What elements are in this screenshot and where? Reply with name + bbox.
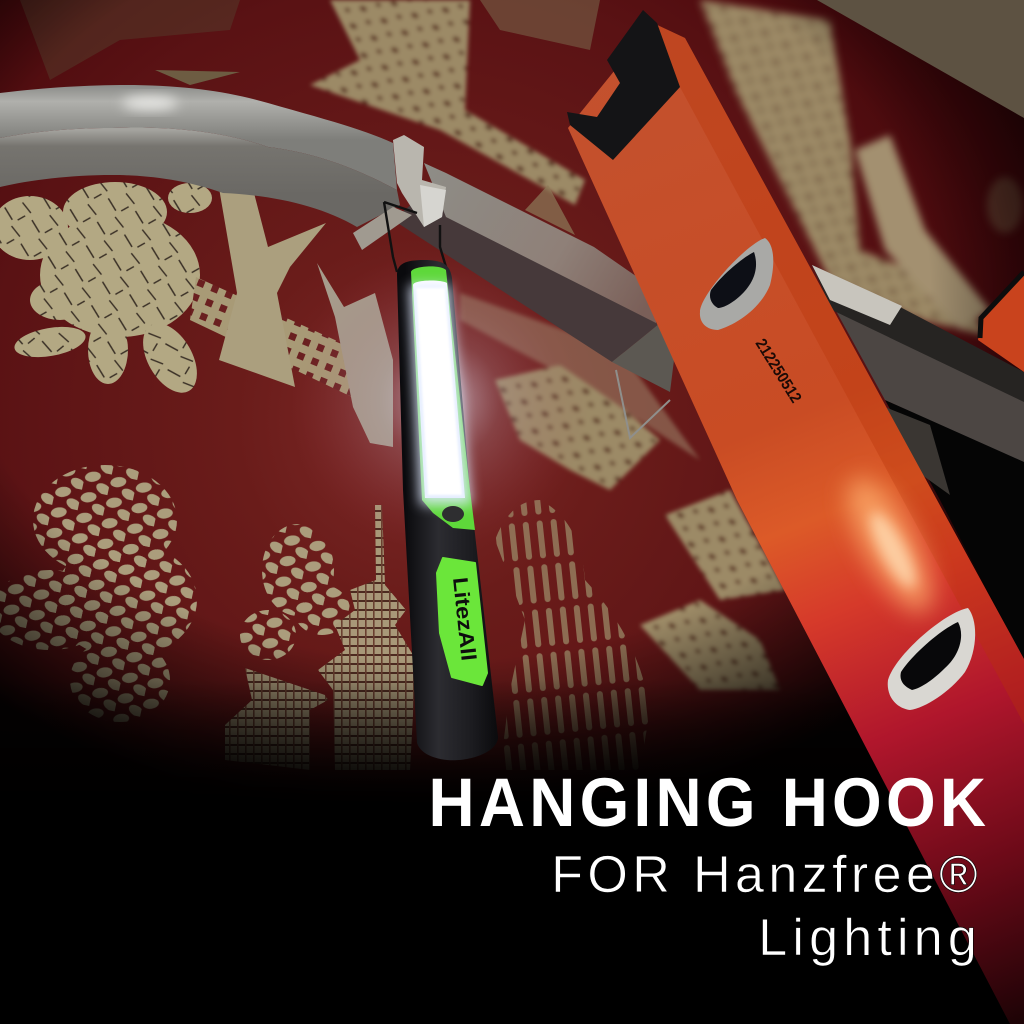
- subheading: FOR Hanzfree®: [551, 846, 982, 904]
- LED glow: [409, 285, 472, 505]
- logo text: LitezAll: [448, 576, 480, 662]
- green surround: [411, 266, 475, 530]
- wallpaper motif: willow tree: [495, 500, 650, 770]
- heading: HANGING HOOK: [428, 764, 990, 841]
- black top bracket: [567, 10, 680, 160]
- ceiling corner: [817, 0, 1024, 118]
- lamp body: [397, 260, 498, 760]
- subheading: [551, 846, 982, 967]
- wallpaper motif: top band: [20, 0, 600, 235]
- green logo badge: [437, 558, 487, 685]
- LED core: [416, 288, 462, 495]
- orange fibreglass ladder: [567, 10, 1024, 1024]
- subheading: Lighting: [758, 909, 982, 967]
- specular highlight on ladder: [832, 467, 948, 623]
- LitezAll work light: [397, 260, 498, 760]
- ladder side strip: [653, 23, 1024, 724]
- serial number: 212250512: [752, 336, 804, 406]
- second ladder fragment at right: [978, 272, 1024, 372]
- wallpaper motif: peony flower: [0, 182, 212, 402]
- wallpaper motif: leafy tree: [0, 465, 197, 722]
- power button: [442, 506, 464, 522]
- black fade at bottom: [0, 680, 1024, 1024]
- dark void behind ladder: [885, 400, 1024, 660]
- upper rung opening: [710, 252, 756, 308]
- lower rung opening: [900, 622, 961, 690]
- upper rung hole: [700, 238, 773, 330]
- aluminium rail right section with label: [812, 265, 1024, 495]
- lens panel: [413, 281, 465, 498]
- wallpaper motif: lower centre flowers and band: [460, 293, 785, 690]
- wallpaper motif: small trees: [240, 524, 350, 660]
- wallpaper motif: pagodas: [225, 505, 416, 770]
- aluminium rail curved section: [0, 85, 674, 438]
- metal clip on rail: [353, 135, 446, 272]
- lamp glow on wall: [290, 250, 590, 550]
- wallpaper motif: standing figure with lattice fence: [190, 188, 393, 447]
- wallpaper motif: blurred upper right figures: [700, 0, 1023, 335]
- lower rung hole: [888, 608, 975, 710]
